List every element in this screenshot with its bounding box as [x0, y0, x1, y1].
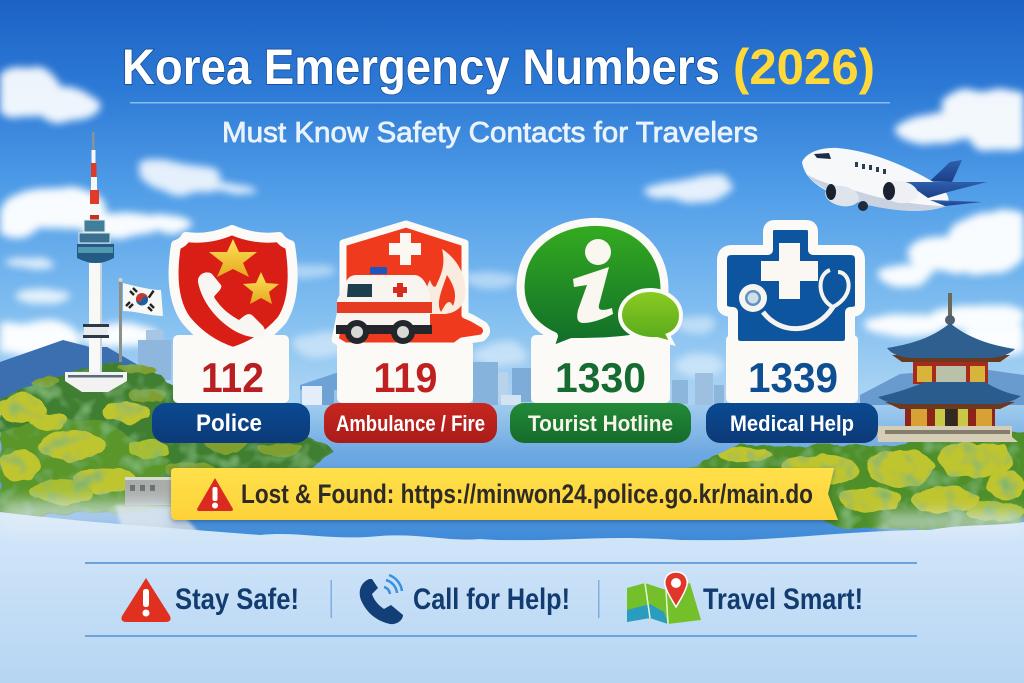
footer rules	[85, 562, 917, 637]
tourist label pill	[510, 403, 691, 443]
distant mountains	[0, 340, 1024, 445]
stone wall	[115, 477, 205, 540]
ambulance label pill: Ambulance / Fire	[336, 411, 485, 436]
police number plate	[173, 335, 289, 403]
police label pill	[152, 403, 310, 443]
icon: information speech bubbles	[521, 222, 681, 351]
banner ribbon	[171, 468, 838, 520]
title: (2026)	[733, 39, 875, 95]
ambulance label pill	[324, 403, 497, 443]
right green hills	[690, 430, 1024, 532]
medical label pill	[706, 403, 878, 443]
lost and found banner	[171, 468, 838, 520]
city skyline	[138, 330, 724, 422]
medical number plate	[726, 335, 858, 403]
police number plate: 112	[201, 354, 264, 401]
tourist label pill: Tourist Hotline	[528, 411, 673, 436]
police card	[152, 230, 310, 443]
icon: police shield	[174, 230, 293, 352]
left green hills	[0, 362, 335, 515]
tourist number plate: 1330	[555, 354, 646, 401]
river	[0, 405, 1024, 540]
police label pill: Police	[196, 410, 262, 437]
icon: medical cross and stethoscope	[722, 225, 860, 346]
lower pale panel with mist	[0, 500, 1024, 683]
illustration: airplane	[802, 148, 987, 211]
subtitle: Must Know Safety Contacts for Travelers	[222, 117, 758, 149]
icon: ambulance and fire	[335, 224, 487, 346]
banner text: Lost & Found: https://minwon24.police.go.kr/main.do	[241, 479, 813, 509]
illustration: N Seoul Tower	[65, 132, 127, 392]
icon: phone with signal	[360, 575, 403, 624]
footer item: call for help	[360, 575, 570, 624]
footer item: stay safe	[122, 578, 299, 622]
icon: warning triangle	[122, 578, 170, 622]
tourist number plate	[531, 335, 670, 403]
title divider	[130, 102, 890, 104]
footer item: travel smart	[627, 572, 863, 624]
illustration: Korean pagoda	[877, 293, 1021, 442]
footer item: call for help: Call for Help!	[413, 583, 570, 616]
tourist hotline card	[510, 222, 691, 443]
medical number plate: 1339	[748, 354, 838, 401]
medical help card	[706, 225, 878, 443]
icon: warning triangle	[197, 478, 233, 511]
ambulance and fire card	[324, 224, 497, 443]
illustration: Korean flag	[118, 278, 163, 362]
footer item: travel smart: Travel Smart!	[703, 583, 863, 616]
footer item: stay safe: Stay Safe!	[175, 583, 299, 616]
icon: map with pin	[627, 572, 701, 624]
ambulance number plate	[337, 340, 473, 403]
medical label pill: Medical Help	[730, 411, 854, 436]
ambulance number plate: 119	[374, 354, 438, 401]
title: Korea Emergency Numbers	[122, 39, 720, 95]
clouds	[0, 66, 1024, 376]
